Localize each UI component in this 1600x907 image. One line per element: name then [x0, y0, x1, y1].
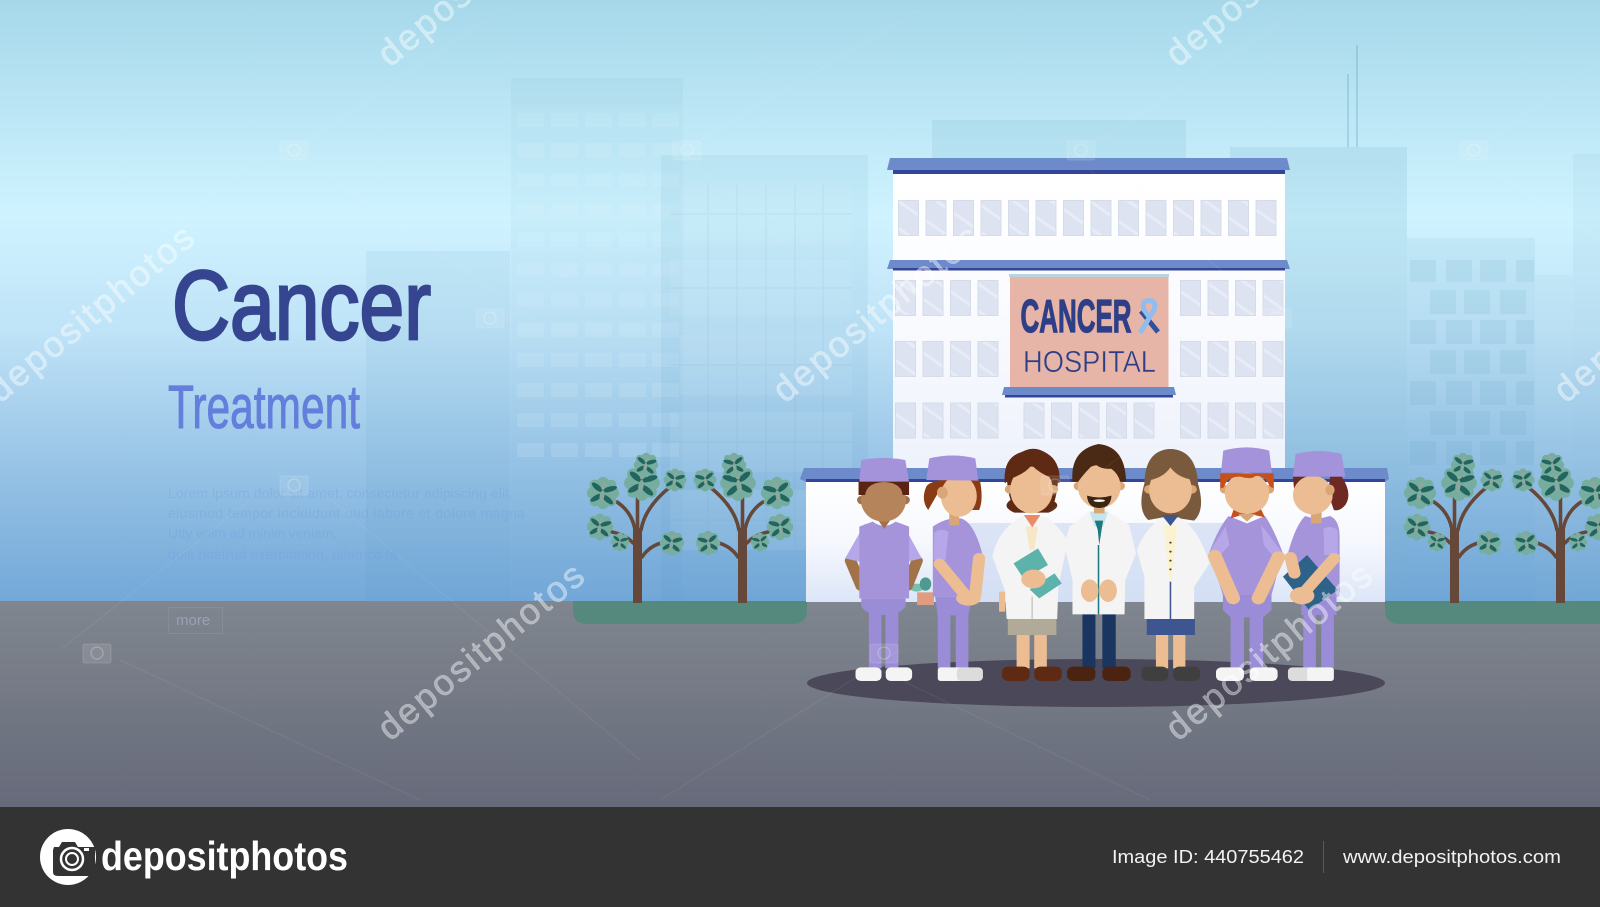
lower wing	[800, 468, 1389, 602]
left planter	[573, 601, 807, 624]
person: female doctor	[1137, 449, 1209, 681]
faint body text: quis nostrud exercitation, ullamco la	[168, 546, 397, 562]
watermark logos: depositphotos	[764, 216, 987, 410]
windows	[896, 200, 1283, 438]
sign text: cancer: CANCER	[1020, 290, 1132, 342]
footer bar	[0, 807, 1600, 907]
icon: potted plant	[910, 577, 934, 605]
road ground	[0, 601, 1600, 807]
sign text: hospital: HOSPITAL	[1023, 344, 1156, 379]
background city skyline	[366, 45, 1600, 601]
right planter	[1385, 601, 1600, 624]
person: nurse 4 with clipboard	[1283, 451, 1348, 681]
icon: awareness ribbon	[1140, 300, 1158, 333]
middle ledge	[887, 260, 1290, 270]
hospital building	[800, 158, 1389, 602]
footer logo icon: camera	[40, 829, 96, 885]
main tower wall	[893, 174, 1285, 468]
subtitle: Treatment	[168, 373, 360, 441]
faint body text	[168, 485, 525, 562]
person: nurse 1	[845, 458, 922, 681]
watermark logos: depositphotos	[1157, 554, 1380, 748]
person: nurse 3	[1209, 447, 1283, 681]
footer divider	[1323, 841, 1324, 873]
watermark camera icons	[83, 141, 1488, 663]
person: nurse 2	[924, 455, 983, 681]
person: doctor with clipboard	[992, 449, 1068, 681]
top roof	[887, 158, 1290, 174]
watermark logos: depositphotos	[369, 554, 592, 748]
footer website: www.depositphotos.com	[1342, 846, 1561, 867]
faint body text: Lorem ipsum dolor sit amet, consectetur adipiscing elit,	[168, 485, 513, 501]
more button: more	[176, 612, 210, 629]
left trees	[587, 453, 793, 603]
main title: Cancer	[172, 250, 431, 360]
footer logo wordmark: depositphotos	[101, 833, 348, 879]
background sky	[0, 0, 1600, 602]
ground shadow	[807, 659, 1385, 707]
hospital sign	[1002, 274, 1176, 398]
more button	[168, 608, 222, 634]
medical team	[845, 444, 1348, 681]
faint body text: eiusmod tempor incididunt utid labore et dolore magna	[168, 505, 525, 521]
right trees	[1404, 453, 1600, 603]
person: male doctor	[1064, 444, 1136, 681]
faint body text: Utty enim ad minim veniam,	[168, 525, 337, 541]
footer image id: Image ID: 440755462	[1112, 846, 1304, 867]
sign ledge	[1002, 387, 1176, 398]
